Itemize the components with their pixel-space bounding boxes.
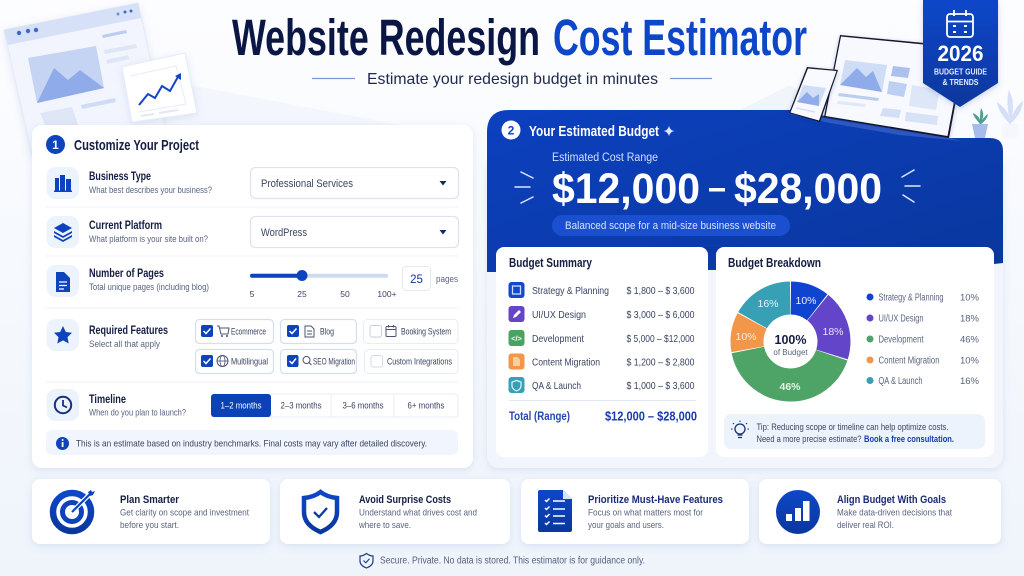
card: avoid surprise costs: where to save. — [358, 520, 411, 531]
feature: booking system — [364, 320, 458, 344]
legend: 46% — [960, 334, 980, 346]
row: content migration — [508, 354, 695, 370]
row: strategy: $ 1,800 – $ 3,600 — [626, 285, 695, 297]
feature: custom integrations — [364, 350, 458, 374]
donut chart — [735, 295, 844, 393]
timeline options: 6+ months — [408, 400, 445, 412]
row: business type: What best describes your business? — [89, 185, 212, 196]
row: qa: QA & Launch — [532, 380, 581, 392]
step 2 heading: Your Estimated Budget — [529, 123, 659, 140]
icon: bar chart circle — [776, 490, 820, 534]
timeline options: 3–6 months — [342, 400, 384, 412]
timeline options: 2–3 months — [280, 400, 322, 412]
row: number of pages: pages — [436, 274, 458, 285]
icon: shield — [304, 492, 337, 532]
feature: multilingual — [196, 350, 274, 374]
slider: 5 — [250, 289, 255, 299]
row: strategy — [508, 282, 695, 298]
legend: 16% — [960, 376, 980, 387]
row: development: Development — [532, 333, 584, 345]
card: plan smarter — [32, 479, 270, 544]
row: required features: Select all that apply — [89, 339, 160, 350]
illustration: browser window with chart — [4, 3, 197, 155]
row: development: </> — [511, 334, 523, 343]
donut chart: 10% — [795, 295, 817, 307]
card: budget breakdown — [716, 247, 994, 457]
feature: multilingual: Multilingual — [231, 356, 268, 368]
card: budget breakdown: Budget Breakdown — [728, 256, 821, 270]
row: ui/ux — [508, 306, 695, 322]
legend — [866, 292, 980, 387]
total: $12,000 – $28,000 — [605, 410, 697, 424]
scope pill: Balanced scope for a mid-size business website — [565, 220, 776, 232]
step 1 heading: Customize Your Project — [74, 137, 199, 154]
row: development — [508, 330, 695, 346]
feature: custom integrations: Custom Integrations — [387, 356, 452, 368]
row: timeline: Timeline — [89, 394, 126, 406]
panel: your estimated budget — [487, 110, 1003, 468]
subtitle: Estimate your redesign budget in minutes — [367, 71, 658, 88]
card: plan smarter: Get clarity on scope and investment — [120, 508, 249, 518]
feature: blog: Blog — [320, 326, 334, 338]
legend: 18% — [960, 314, 980, 324]
legend: 10% — [960, 292, 980, 304]
legend: Content Migration — [878, 356, 940, 366]
row: ui/ux: $ 3,000 – $ 6,000 — [626, 309, 695, 321]
blue header area — [487, 110, 1003, 272]
row: timeline — [46, 389, 458, 421]
row: current platform: Current Platform — [89, 220, 162, 232]
row: business type: Business Type — [89, 171, 151, 183]
card: budget summary — [496, 247, 708, 457]
timeline options: 1–2 months — [220, 400, 262, 412]
step 1 heading — [46, 135, 199, 154]
tip box: Need a more precise estimate? — [756, 434, 862, 445]
row: content migration: $ 1,200 – $ 2,800 — [626, 356, 695, 368]
feature: seo migration: SEO Migration — [313, 356, 355, 368]
badge: 2026 budget guide: & TRENDS — [942, 77, 979, 87]
card: avoid surprise costs: Understand what drives cost and — [359, 508, 477, 518]
sparkle rays — [515, 170, 920, 203]
legend: 10% — [960, 356, 980, 366]
legend: QA & Launch — [878, 376, 922, 387]
card: budget summary: Budget Summary — [509, 256, 592, 270]
footer: privacy note: Secure. Private. No data is stored. This estimator is for guidance only. — [380, 556, 645, 566]
tip box: Tip: Reducing scope or timeline can help optimize costs. — [756, 422, 948, 433]
row: number of pages — [46, 265, 458, 299]
slider: 50 — [340, 289, 350, 299]
tip box — [724, 414, 985, 449]
card: avoid surprise costs: Avoid Surprise Costs — [359, 494, 451, 506]
phone — [789, 67, 838, 122]
slider: 100+ — [377, 289, 397, 299]
donut chart: 16% — [757, 298, 779, 310]
icon: target — [53, 490, 95, 531]
icon: calendar — [947, 10, 973, 37]
scope pill — [552, 215, 790, 236]
legend: Strategy & Planning — [878, 292, 944, 304]
row: current platform — [46, 216, 458, 248]
card: prioritize must-have features: your goals and users. — [588, 520, 664, 531]
row: number of pages: Total unique pages (including blog) — [89, 282, 209, 293]
icon: potted plants — [972, 90, 1023, 138]
row: business type — [46, 167, 458, 199]
row: qa: $ 1,000 – $ 3,600 — [626, 380, 695, 392]
row: development: $ 5,000 – $12,000 — [626, 333, 695, 345]
illustration: tablet and phone — [785, 35, 966, 141]
total: Total (Range) — [509, 411, 570, 423]
row: current platform: What platform is your site built on? — [89, 234, 208, 245]
row: ui/ux: UI/UX Design — [532, 309, 586, 321]
feature: blog — [280, 320, 356, 344]
donut chart: 46% — [779, 381, 801, 393]
row: timeline: When do you plan to launch? — [89, 408, 186, 418]
row: strategy: Strategy & Planning — [532, 285, 609, 297]
slider — [250, 270, 397, 299]
card: avoid surprise costs — [280, 479, 510, 544]
row: content migration: Content Migration — [532, 356, 600, 368]
total — [509, 410, 697, 424]
donut chart: 100% — [775, 333, 806, 347]
card: prioritize must-have features: Focus on what matters most for — [588, 508, 703, 518]
row: number of pages: Number of Pages — [89, 268, 164, 280]
step 2 heading: 2 — [508, 124, 515, 138]
footer: privacy note — [360, 554, 645, 568]
title: Cost Estimator — [553, 9, 807, 66]
note: estimate disclaimer: This is an estimate based on industry benchmarks. Final costs may vary after detailed discovery. — [76, 438, 427, 450]
donut chart: 10% — [735, 331, 757, 343]
panel: customize your project — [32, 125, 473, 468]
note: estimate disclaimer — [46, 430, 458, 455]
row: qa — [508, 377, 695, 393]
donut chart: 18% — [822, 326, 844, 338]
estimated cost range: Estimated Cost Range — [552, 152, 658, 164]
row: number of pages: 25 — [410, 274, 423, 286]
card: plan smarter: before you start. — [120, 520, 179, 531]
title: Website Redesign — [232, 9, 540, 66]
feature: booking system: Booking System — [401, 326, 451, 338]
card: align budget with goals: Align Budget With Goals — [837, 494, 946, 506]
timeline options — [211, 394, 458, 417]
card: plan smarter: Plan Smarter — [120, 494, 180, 506]
step 1 heading: 1 — [52, 138, 59, 152]
slider: 25 — [297, 289, 307, 299]
icon: checklist document — [538, 490, 572, 532]
feature: seo migration — [280, 350, 356, 374]
card: align budget with goals — [759, 479, 1001, 544]
row: required features: Required Features — [89, 325, 168, 337]
row: current platform: WordPress — [261, 227, 307, 239]
feature: ecommerce: Ecommerce — [231, 326, 266, 338]
donut chart: of Budget — [773, 348, 808, 357]
card: align budget with goals: Make data-driven decisions that — [837, 508, 952, 518]
estimated cost range — [552, 152, 882, 213]
illustration: mini line chart card — [122, 53, 197, 122]
estimated cost range: $12,000 — [552, 165, 700, 213]
row: business type: Professional Services — [261, 178, 353, 190]
tip box: Book a free consultation. — [864, 434, 954, 445]
badge: 2026 budget guide: BUDGET GUIDE — [934, 66, 987, 76]
estimated cost range: $28,000 — [734, 165, 882, 213]
row: required features — [46, 319, 458, 374]
badge: 2026 budget guide — [923, 0, 998, 107]
badge: 2026 budget guide: 2026 — [938, 41, 984, 66]
legend: Development — [878, 334, 924, 346]
tablet — [824, 35, 966, 138]
card: prioritize must-have features — [521, 479, 749, 544]
legend: UI/UX Design — [878, 314, 924, 324]
feature: ecommerce — [196, 320, 274, 344]
card: prioritize must-have features: Prioritize Must-Have Features — [588, 494, 723, 506]
step 2 heading — [502, 120, 674, 140]
card: align budget with goals: deliver real ROI. — [837, 520, 894, 531]
